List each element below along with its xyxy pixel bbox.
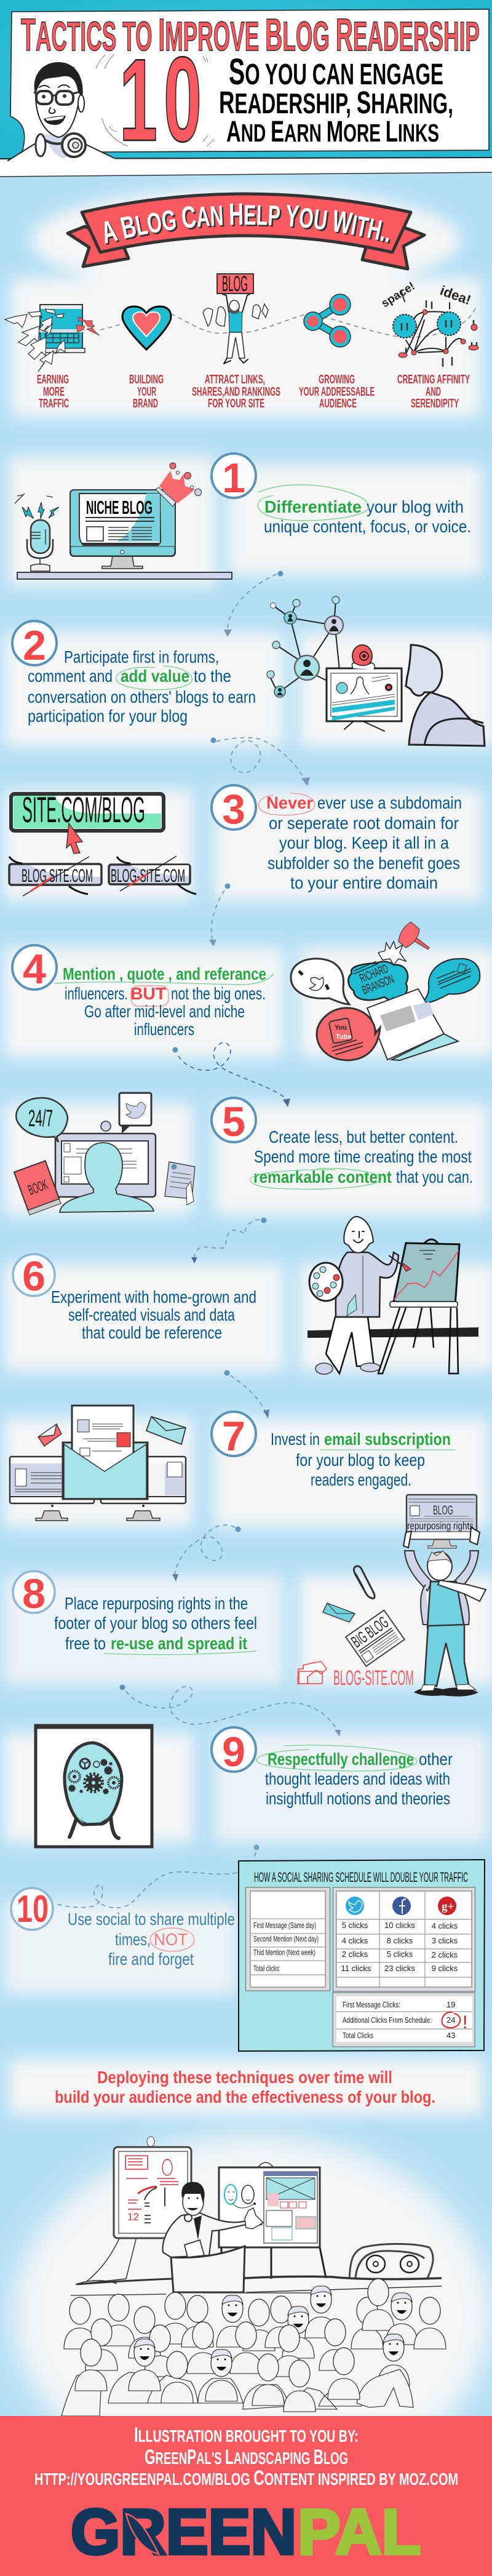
ground shadow and feet [414, 1687, 478, 1697]
big number 10: 0 [164, 32, 202, 167]
arrow 8 to 9 [119, 1685, 341, 1737]
step 6 text [51, 1287, 256, 1342]
header white title box [10, 9, 489, 152]
twitter bubble [291, 959, 349, 1004]
ribbon text: A BLOG CAN HELP YOU WITH.. [105, 203, 389, 244]
step 10 text: Use social to share multiple [68, 1910, 235, 1929]
step 9 text [256, 1745, 453, 1808]
step 5 text: that you can. [396, 1167, 473, 1186]
arrow 7 to 8 [172, 1525, 241, 1582]
held monitor [403, 1495, 480, 1548]
step 1 text [258, 485, 471, 536]
totals panel: 19 [446, 2000, 455, 2009]
greenpal logo [71, 2497, 421, 2568]
step 10 text: times, [115, 1930, 151, 1949]
clicks data panel: 2 clicks [342, 1950, 368, 1959]
step 7 text: Invest in [271, 1430, 320, 1449]
red cursor [66, 823, 82, 854]
step 2 text [28, 647, 256, 726]
step 4 text: Go after mid-level and niche [84, 1002, 245, 1021]
icon: network with space and idea [379, 280, 478, 367]
step 3 text: to your entire domain [290, 873, 438, 892]
step 8 text: free to [65, 1634, 106, 1653]
subtitle: AND EARN MORE LINKS [226, 116, 439, 148]
step 7 number: 7 [222, 1413, 245, 1460]
step 6 illustration: painter with easel [308, 1217, 478, 1374]
twitter bubble [119, 1093, 151, 1134]
step 2 illustration: network and person at monitor [267, 596, 485, 746]
benefits dashed connector [100, 305, 477, 337]
step 9 number: 9 [222, 1729, 245, 1775]
left flipboard [76, 2137, 191, 2284]
arrow 6 to 7 [224, 1370, 269, 1418]
label: earning more traffic: MORE [43, 385, 65, 399]
step 3 number [212, 785, 256, 833]
label: attract links: SHARES,AND RANKINGS [192, 385, 280, 399]
soft panels background [4, 188, 492, 2114]
label: earning more traffic: TRAFFIC [39, 397, 69, 410]
step 3 text: ever use a subdomain [317, 793, 462, 812]
totals panel [333, 1993, 475, 2047]
icon: google plus: g+ [442, 1900, 454, 1913]
clicks data panel: 5 clicks [387, 1950, 413, 1959]
arrow 4 to 5 [172, 1042, 290, 1107]
step 1 text: your blog with [367, 497, 464, 516]
icon: facebook [392, 1897, 411, 1915]
red blog-site icon and text [298, 1662, 414, 1690]
clicks data panel: 2 clicks [432, 1950, 458, 1959]
step 2 text: to the [194, 666, 231, 686]
hammer [399, 922, 429, 950]
label: creating affinity [397, 373, 470, 410]
step 4 illustration: influencer bubbles [291, 922, 480, 1060]
banner ribbon [66, 192, 426, 271]
footer [0, 2416, 492, 2576]
step 5 number: 5 [222, 1098, 245, 1145]
step 3 illustration: url bars [9, 790, 196, 896]
icon: share nodes [304, 294, 351, 347]
clicks data panel: 9 clicks [432, 1964, 458, 1973]
arrow 2 to 3 [210, 737, 310, 786]
palette [309, 1263, 343, 1301]
flying envelopes [38, 1424, 62, 1446]
step 6 number [13, 1253, 55, 1300]
label: attract links [192, 373, 280, 410]
step 1 illustration: niche blog monitor [15, 463, 232, 579]
icon: heart [122, 306, 171, 350]
step 10 number: 10 [17, 1888, 49, 1930]
label: building your brand: BUILDING [129, 373, 164, 386]
step 3 illustration: url bars: SITE.COM/BLOG [22, 790, 145, 830]
label: growing audience [299, 373, 375, 410]
left label panel [246, 1887, 330, 1991]
held monitor: BLOG [433, 1503, 453, 1518]
clicks data panel [333, 1887, 475, 1991]
stage and chair [77, 2244, 442, 2292]
step 7 number [212, 1412, 256, 1460]
label: building your brand: YOUR [137, 385, 156, 399]
clicks data panel: 5 clicks [342, 1921, 368, 1930]
left label panel: Thid Mention (Next week) [253, 1948, 315, 1957]
middle row [85, 2319, 117, 2370]
label: earning more traffic [37, 373, 69, 410]
totals panel: Total Clicks [343, 2031, 373, 2040]
closing illustration: presenter and audience [62, 2137, 446, 2416]
closing statement [55, 2068, 435, 2106]
microphone [15, 494, 59, 571]
back row of audience [64, 2297, 96, 2349]
step 4 illustration: influencer bubbles: You [335, 1024, 347, 1031]
red book [14, 1161, 61, 1215]
step 9 text: insightfull notions and theories [266, 1789, 450, 1808]
teal speech bubble [422, 959, 480, 1003]
audience [62, 2279, 446, 2416]
totals panel: First Message Clicks: [343, 2000, 400, 2009]
24/7 bubble: 24/7 [28, 1106, 53, 1132]
gears [69, 1759, 119, 1794]
arrow 9 to 10 [54, 1845, 260, 1908]
step 10 text: NOT [154, 1930, 188, 1949]
left flipboard: 12 [127, 2211, 139, 2223]
step 4 text: not the big ones. [171, 984, 266, 1003]
big blog newspaper: BIG BLOG [348, 1613, 392, 1651]
clicks data panel: 8 clicks [387, 1936, 413, 1945]
icon: network with space and idea: idea! [438, 282, 473, 308]
icon: man holding blog sign: BLOG [222, 272, 248, 296]
step 2 text: comment and [28, 666, 113, 686]
right display board [219, 2162, 326, 2279]
step 7 illustration: email envelope and monitors [10, 1406, 186, 1521]
greenpal logo: GREEN [71, 2497, 296, 2568]
presenter [163, 2182, 263, 2292]
step 3 number: 3 [222, 786, 245, 833]
step 2 text: Participate first in forums, [64, 647, 219, 666]
step 8 text: Place repurposing rights in the [65, 1594, 248, 1613]
step 5 illustration: desk with monitor [14, 1093, 195, 1215]
step 9 text: other [419, 1750, 453, 1769]
left label panel: First Message (Same day) [253, 1921, 316, 1930]
arrow 1 to 2 [224, 571, 283, 637]
icon: man holding blog sign [203, 272, 268, 364]
icon: google plus [438, 1897, 456, 1915]
step 3 text: subfolder so the benefit goes [268, 854, 460, 873]
clicks data panel: 11 clicks [341, 1964, 371, 1973]
arrow 5 to 6 [191, 1217, 267, 1263]
red book: BOOK [26, 1176, 50, 1198]
step 3 text: or seperate root domain for [269, 814, 459, 833]
label: growing audience: YOUR ADDRESSABLE [299, 385, 375, 399]
label: growing audience: GROWING [319, 373, 355, 386]
step 5 text [250, 1127, 473, 1189]
step 3 text: Never [266, 793, 313, 812]
step 8 number [13, 1570, 55, 1617]
step 4 illustration: influencer bubbles: Tube [336, 1033, 351, 1041]
table background [239, 1860, 485, 2051]
step 5 text: remarkable content [253, 1167, 392, 1186]
step 2 text: conversation on others' blogs to earn [28, 687, 256, 706]
clicks data panel: 4 clicks [342, 1936, 368, 1945]
step 8 text: re-use and spread it [111, 1634, 247, 1653]
paperclip [354, 1566, 375, 1598]
footer credits: GREENPAL'S LANDSCAPING BLOG [145, 2446, 348, 2469]
step 4 illustration: influencer bubbles: BRANSON [360, 972, 396, 998]
benefit labels [37, 373, 470, 410]
step 1 number: 1 [222, 455, 245, 502]
header character with glasses and headphones [7, 62, 115, 161]
step 9 number [212, 1727, 256, 1775]
step 3 illustration: url bars: BLOG-SITE.COM [111, 866, 185, 886]
clicks data panel: 4 clicks [432, 1921, 458, 1930]
front row [62, 2372, 166, 2416]
label: attract links: FOR YOUR SITE [208, 397, 264, 410]
left label panel: Total clicks: [253, 1964, 280, 1973]
step 2 text: participation for your blog [28, 706, 188, 726]
closing statement: Deploying these techniques over time will [97, 2068, 392, 2087]
youtube red bubble [317, 1008, 380, 1060]
step 4 text: influencers. [65, 984, 128, 1003]
step 9 text: thought leaders and ideas with [265, 1769, 450, 1788]
step 6 text: that could be reference [82, 1323, 222, 1342]
label: building your brand: BRAND [133, 397, 158, 410]
step 4 number [12, 945, 57, 993]
held monitor: repurposing rights [407, 1520, 474, 1532]
label: building your brand [129, 373, 164, 410]
step 7 text: readers engaged. [311, 1470, 411, 1489]
step 2 number: 2 [23, 622, 46, 669]
step 4 number: 4 [23, 946, 46, 993]
step 7 text [271, 1430, 455, 1489]
subtitle: READERSHIP, SHARING, [219, 85, 453, 120]
greenpal logo: PAL [298, 2497, 421, 2568]
label: growing audience: AUDIENCE [319, 397, 357, 410]
footer credits [34, 2423, 458, 2490]
step 10 text [68, 1910, 235, 1969]
step 6 text: Experiment with home-grown and [51, 1287, 256, 1306]
icon: twitter [346, 1897, 364, 1915]
step 4 text: Mention , quote , and referance [63, 964, 266, 983]
big number 10: 1 [119, 35, 157, 166]
left label panel: Second Mention (Next day) [253, 1934, 319, 1943]
social sharing schedule table [239, 1860, 485, 2051]
subtitle [219, 51, 453, 148]
24/7 bubble [16, 1098, 68, 1142]
small envelope [323, 1603, 355, 1622]
crown [156, 463, 202, 506]
icon: network with space and idea: space! [379, 280, 418, 310]
step 4 text: influencers [134, 1020, 194, 1039]
ribbon main arc [82, 194, 411, 252]
footer credits: ILLUSTRATION BROUGHT TO YOU BY: [134, 2423, 359, 2447]
step 9 text: Respectfully challenge [268, 1750, 414, 1769]
step 5 number [212, 1098, 256, 1145]
label: creating affinity: AND [426, 385, 441, 399]
step 1 illustration: niche blog monitor: NICHE BLOG [86, 497, 153, 518]
step 2 number [12, 621, 57, 669]
step 3 text: your blog. Keep it all in a [279, 833, 449, 852]
ribbon left tail [68, 226, 129, 266]
big blog newspaper [346, 1610, 405, 1666]
ribbon right tail [362, 228, 424, 269]
step 7 text: email subscription [324, 1430, 451, 1449]
step 8 text: footer of your blog so others feel [54, 1614, 257, 1633]
step 1 text: Differentiate [264, 497, 362, 516]
monitors [10, 1457, 186, 1521]
header band [0, 0, 492, 177]
step 8 number: 8 [22, 1570, 46, 1617]
step 10 text: fire and forget [108, 1950, 194, 1969]
step 9 illustration: head with gears [36, 1726, 152, 1847]
step 6 text: self-created visuals and data [68, 1305, 235, 1324]
step 3 illustration: url bars: BLOG.SITE.COM [22, 866, 93, 886]
label: creating affinity: SERENDIPITY [411, 397, 459, 410]
step 8 illustration: man with blog monitor and horn [298, 1495, 486, 1697]
step 4 text: BUT [130, 984, 166, 1003]
icon: laptop with cursors [5, 305, 100, 372]
totals panel: 24 [446, 2015, 455, 2025]
richard branson cloud [348, 962, 408, 1006]
step 7 text: for your blog to keep [296, 1450, 425, 1470]
clicks data panel: 3 clicks [432, 1936, 458, 1945]
totals panel: 43 [446, 2031, 455, 2040]
big number 10 [96, 32, 214, 167]
arrow 3 to 4 [209, 884, 230, 946]
easel [378, 1239, 459, 1374]
ribbon text: A BLOG CAN HELP YOU WITH.. [106, 205, 391, 245]
red circle callout [442, 2012, 467, 2033]
laptop [367, 989, 444, 1060]
step 2 text: add value [121, 666, 189, 686]
step 4 illustration: influencer bubbles: RICHARD [358, 962, 390, 986]
step 3 text [258, 793, 462, 892]
bottom illustration glow [12, 2135, 492, 2492]
step 6 number: 6 [22, 1253, 46, 1300]
clicks data panel: 23 clicks [384, 1964, 415, 1973]
step 1 number [212, 454, 256, 502]
paper in hand [165, 1162, 195, 1205]
clicks data panel: 10 clicks [384, 1921, 415, 1930]
label: earning more traffic: EARNING [37, 373, 69, 386]
totals panel: Additional Clicks From Schedule: [343, 2015, 432, 2025]
starburst [378, 942, 406, 965]
red circle callout: ! [462, 2012, 467, 2033]
step 8 text [54, 1594, 257, 1655]
step 4 text [54, 964, 274, 1039]
label: attract links: ATTRACT LINKS, [205, 373, 265, 386]
